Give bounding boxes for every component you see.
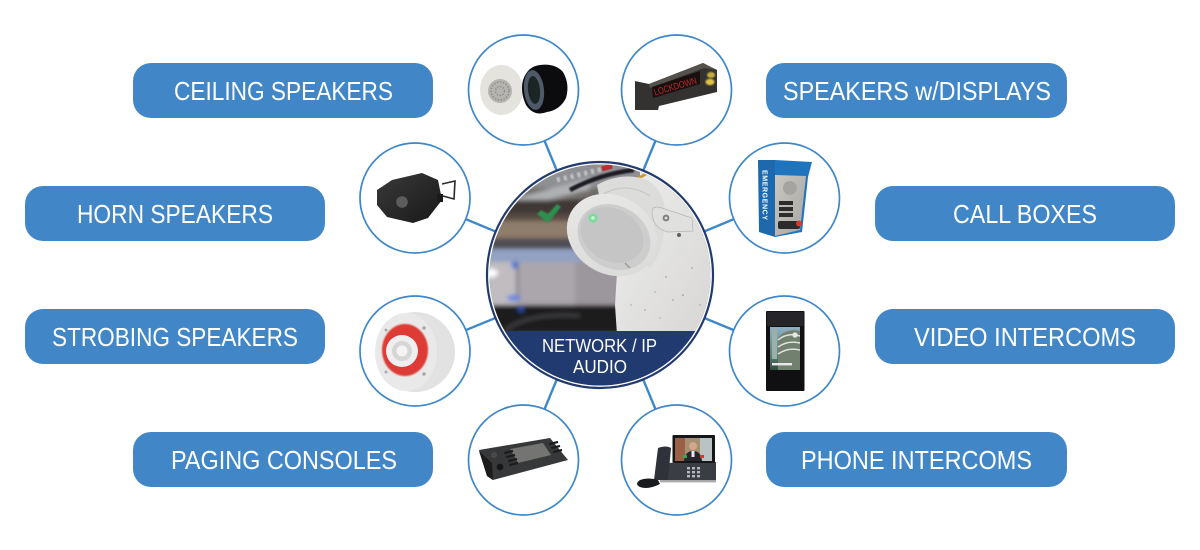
item: phone intercoms [622,405,1067,515]
circle: strobing speaker photo [360,296,470,406]
rail and cables [557,169,603,180]
pill: speakers w/displays [766,63,1067,118]
item: paging consoles [133,405,578,515]
concrete wall [615,172,710,335]
label band [504,331,696,386]
central photo circle: network / IP audio [480,160,720,391]
item: strobing speakers [25,296,470,406]
circle: emergency call box photo: EMERGENCY [760,170,768,220]
pill: horn speakers [25,186,325,241]
pill: ceiling speakers: CEILING SPEAKERS [174,76,393,106]
pill: call boxes: CALL BOXES [953,199,1097,229]
item: video intercoms [730,296,1175,406]
circle: horn speaker photo [360,143,470,253]
item: call boxes [730,143,1175,253]
pill: strobing speakers: STROBING SPEAKERS [52,322,298,352]
pill: call boxes [875,186,1175,241]
pill: speakers w/displays: SPEAKERS w/DISPLAYS [783,76,1051,106]
pill: paging consoles [133,432,433,487]
central label: AUDIO [573,357,627,377]
item: speakers with displays [622,35,1067,145]
green clip [537,204,561,223]
pill: paging consoles: PAGING CONSOLES [171,445,397,475]
pill: strobing speakers [25,309,325,364]
circle: ceiling speaker photo [468,35,578,145]
circle: LED display speaker photo [622,35,732,145]
pill: phone intercoms [766,432,1067,487]
pill: video intercoms: VIDEO INTERCOMS [914,322,1136,352]
circle: paging console photo [468,405,578,515]
circle: LED display speaker photo: LOCKDOWN [653,76,698,98]
pill: video intercoms [875,309,1175,364]
pill: horn speakers: HORN SPEAKERS [77,199,273,229]
item: ceiling speakers [133,35,578,145]
pill: ceiling speakers [133,63,433,118]
mounting bracket [652,207,693,232]
speaker front face [566,194,642,276]
circle: video intercom photo [730,296,840,406]
pill: phone intercoms: PHONE INTERCOMS [801,445,1032,475]
connector lines [415,90,784,460]
circle: emergency call box photo [730,143,840,253]
speaker back housing [597,176,664,240]
central label: NETWORK / IP [542,336,657,356]
circle: phone intercom photo [622,405,732,515]
central label [542,336,657,377]
item: horn speakers [25,143,470,253]
photo of wall-mounted IP speaker [490,164,710,386]
